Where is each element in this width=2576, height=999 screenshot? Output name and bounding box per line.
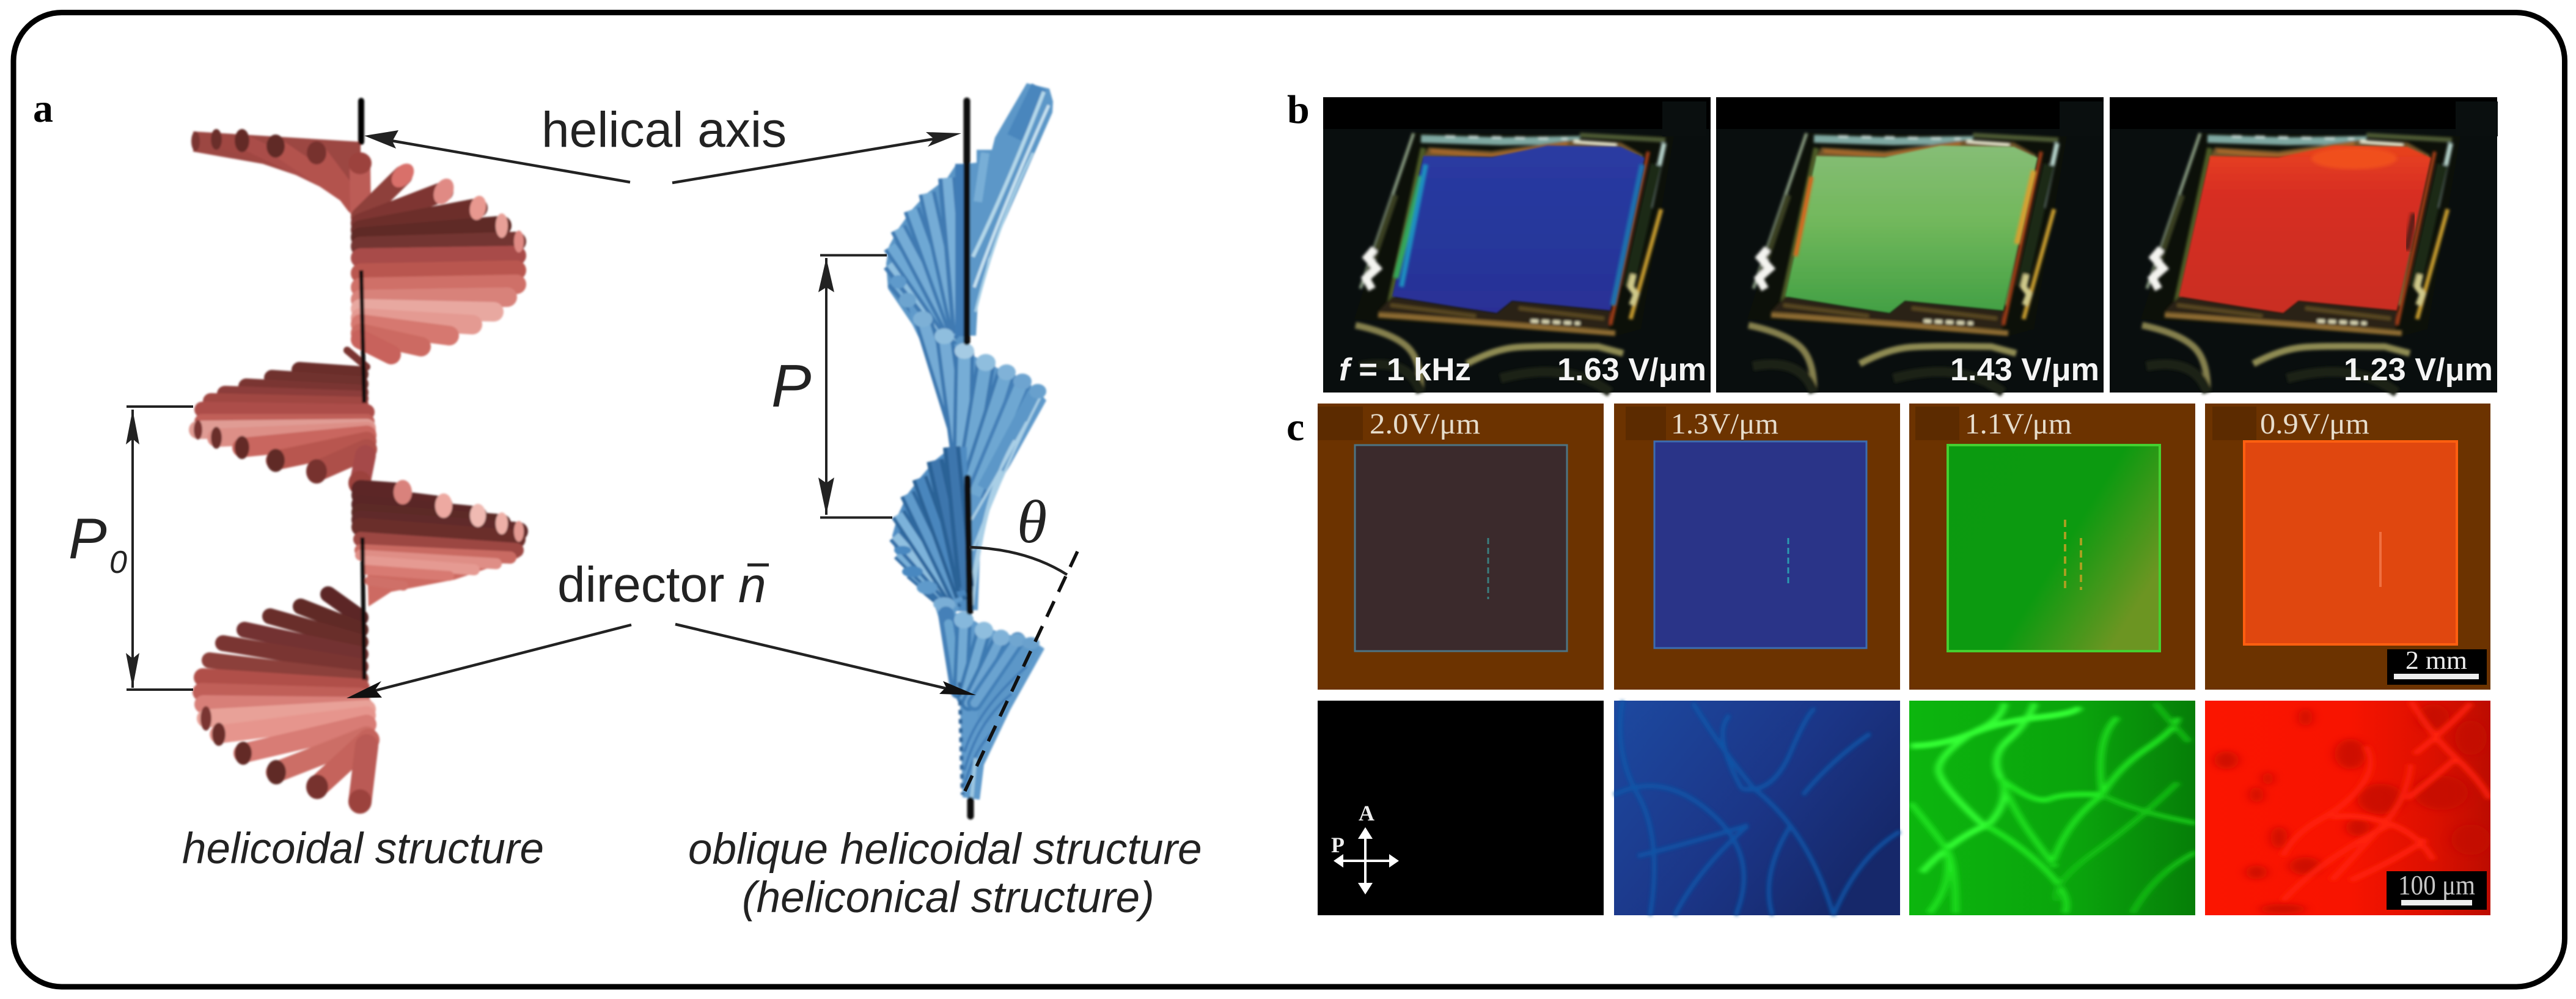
angle theta: θ [1017, 488, 1047, 556]
scale bar: 100 um: 100 μm [2398, 869, 2475, 901]
upper right fan of rods [361, 175, 516, 355]
photo: red state 1.23 V/um: 1.23 V/μm [2344, 352, 2493, 388]
dimension: pitch P0: P [68, 506, 107, 570]
helicoidal helix (red) [191, 101, 524, 814]
scale bar: 2 mm: 2 mm [2405, 647, 2467, 675]
callout: director n: director [557, 557, 724, 613]
arrow: helical axis to blue helix [672, 132, 961, 183]
middle left fan of rods [198, 350, 367, 483]
dimension: pitch P0 [68, 407, 193, 690]
bottom left fan tips [200, 706, 372, 814]
photo: green state 1.43 V/um [1716, 97, 2104, 393]
photo: blue state 1.63 V/um: 1.63 V/μm [1557, 352, 1706, 388]
oblique helicoidal helix (blue) [886, 83, 1053, 816]
micrograph: red [2205, 701, 2490, 915]
photo: 1.3 V/um [1614, 404, 1900, 690]
scale bar: 100 um [2387, 869, 2487, 910]
upper right fan tips [387, 160, 524, 253]
dimension: pitch P0: 0 [109, 545, 127, 580]
callout: helical axis [364, 102, 961, 183]
panel c: reflective device photos, top row [1318, 404, 2490, 690]
arrow: helical axis to red helix [364, 130, 630, 182]
callout: helical axis: helical axis [541, 102, 787, 158]
icon: crossed polarizers [1331, 801, 1399, 894]
lower right fan tips [394, 480, 524, 542]
photo: 0.9 V/um [2205, 404, 2490, 690]
photo: 2.0 V/um: 2.0V/μm [1370, 408, 1480, 440]
photo: 0.9 V/um: 0.9V/μm [2260, 408, 2369, 440]
middle fan of rods [908, 300, 1046, 610]
helical axis (blue helix) [967, 101, 971, 816]
caption: oblique helicoidal structure: oblique helicoidal structure [688, 825, 1202, 874]
top right rod bundle [966, 83, 1053, 336]
inner axis segments [361, 270, 364, 680]
photo: blue state 1.63 V/um: f = 1 kHz [1339, 352, 1471, 388]
micrograph: dark state with polarizer axes [1318, 701, 1604, 915]
callout: director n: n [738, 558, 766, 613]
panel a: helical structures [33, 83, 1202, 922]
middle left fan tips [194, 420, 372, 495]
lower left fan of rods [892, 447, 969, 611]
angle theta [964, 488, 1077, 794]
photo: 1.1 V/um [1909, 404, 2195, 690]
middle fan tips [890, 275, 1046, 399]
bottom cone tips [954, 611, 1040, 649]
lower left fan tips [894, 546, 955, 611]
label a: a [33, 86, 53, 131]
dimension: pitch P [771, 256, 892, 517]
caption: helicoidal structure: helicoidal structure [182, 825, 544, 873]
arrow: director to blue helix [675, 624, 976, 695]
photo: 1.1 V/um: 1.1V/μm [1965, 408, 2072, 440]
micrograph: green [1909, 701, 2196, 915]
micrograph: blue [1614, 701, 1900, 915]
scale bar: 2 mm [2387, 647, 2487, 685]
panel c: microscope images, bottom row [1318, 701, 2490, 915]
bottom cone of rods [936, 610, 1044, 800]
bottom left fan of rods [202, 594, 369, 802]
arrow: director to red helix [347, 625, 631, 698]
caption: oblique helicoidal structure [688, 825, 1202, 922]
upper left fan of rods [886, 164, 967, 435]
icon: crossed polarizers: P [1331, 833, 1345, 857]
photo: red state 1.23 V/um [2110, 97, 2498, 393]
callout: director n [347, 557, 976, 698]
photo: green state 1.43 V/um: 1.43 V/μm [1950, 352, 2099, 388]
photo: 2.0 V/um [1318, 404, 1604, 690]
top band of rods [193, 131, 361, 211]
dimension: pitch P: P [771, 352, 811, 419]
icon: crossed polarizers: A [1359, 801, 1374, 825]
panel b: device photos [1323, 97, 2498, 393]
caption: oblique helicoidal structure: (heliconical structure) [742, 874, 1154, 922]
photo: 1.3 V/um: 1.3V/μm [1671, 408, 1778, 440]
label b: b [1287, 87, 1310, 132]
top band tips [191, 129, 372, 174]
lower right fan of rods [361, 489, 519, 606]
photo: blue state 1.63 V/um [1323, 97, 1711, 393]
label c: c [1286, 405, 1304, 449]
helical axis (red helix) [358, 101, 364, 142]
